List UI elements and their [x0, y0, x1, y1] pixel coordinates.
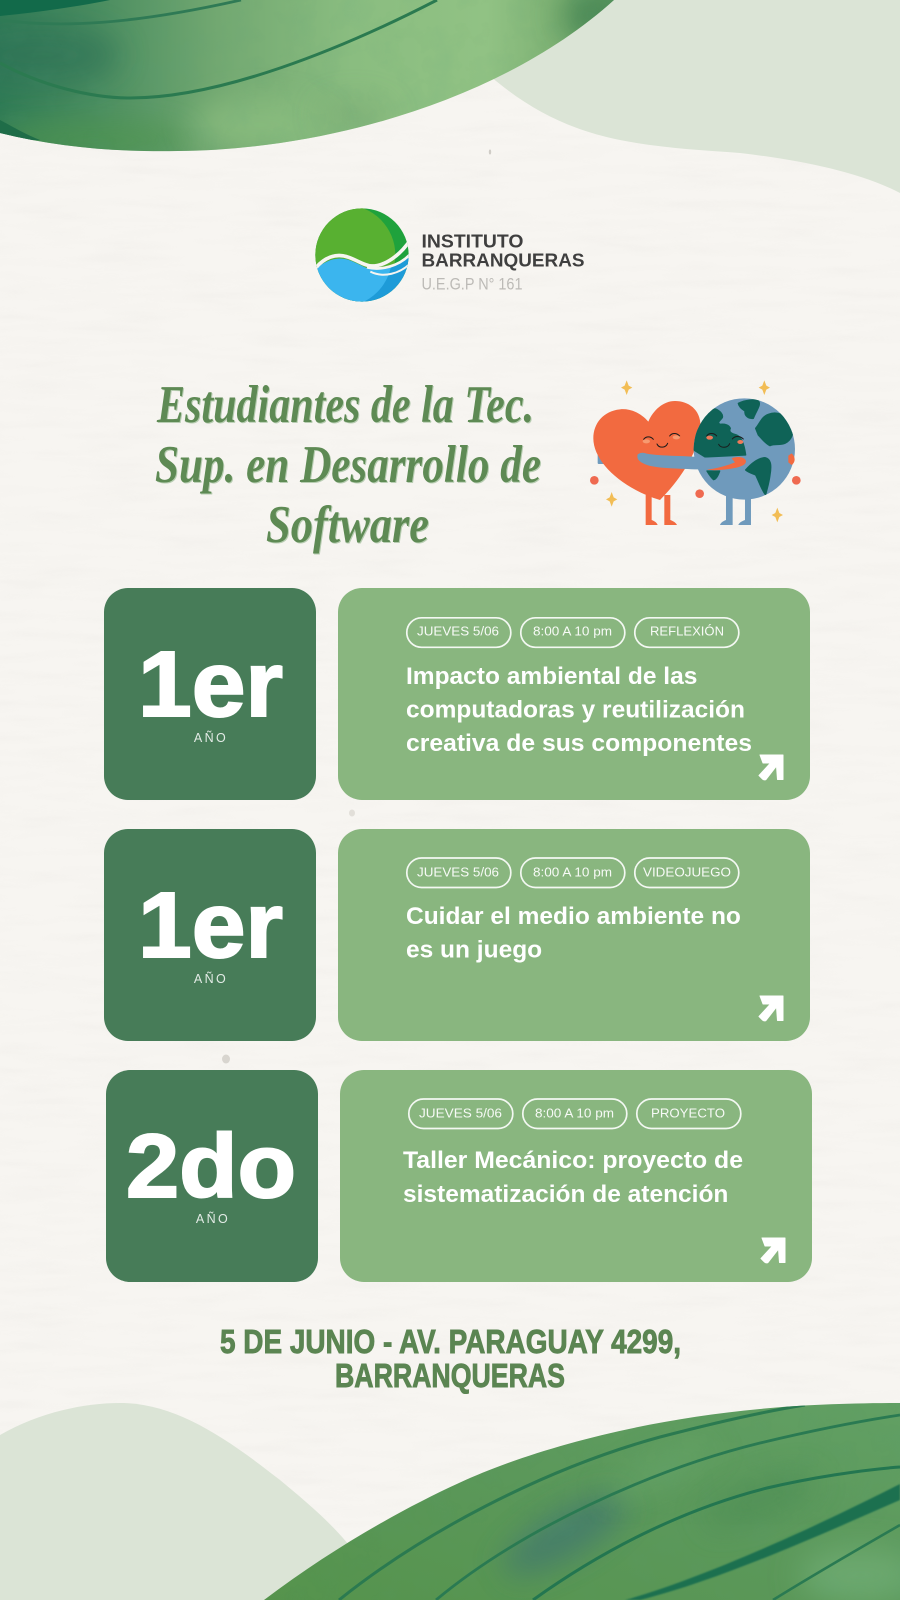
row 2 year box: 1er [138, 873, 283, 977]
row 2 card: 8:00 A 10 pm [533, 864, 612, 880]
row 1 card: JUEVES 5/06 [417, 624, 499, 638]
row 3 year box: AÑO [196, 1212, 230, 1226]
footer date and address [220, 1323, 681, 1394]
logo text: INSTITUTO [422, 232, 524, 252]
title [155, 376, 541, 554]
top left leaf [0, 0, 640, 160]
logo: Instituto Barranqueras [315, 208, 584, 302]
logo text: U.E.G.P N° 161 [422, 276, 522, 294]
row 2 year box [104, 829, 316, 1041]
row 3 card: 8:00 A 10 pm [535, 1106, 614, 1120]
row 2 card: Cuidar el medio ambiente no [406, 903, 741, 930]
flowers [590, 476, 801, 498]
row 3 year box [106, 1070, 318, 1282]
arrow [759, 996, 783, 1021]
row 3 card: PROYECTO [651, 1106, 725, 1120]
bottom right leaf [250, 1395, 900, 1600]
faces [644, 433, 743, 447]
logo text: BARRANQUERAS [422, 250, 584, 270]
title: Sup. en Desarrollo de [155, 436, 541, 494]
row 1 year box: 1er [138, 632, 283, 736]
row 2 card: JUEVES 5/06 [417, 864, 499, 880]
top right pale shape [490, 0, 900, 193]
globe back hand [598, 453, 606, 464]
heart hand on globe side [788, 453, 795, 465]
continents [694, 400, 793, 495]
globe body [694, 398, 795, 500]
footer date and address: BARRANQUERAS [335, 1357, 565, 1394]
row 1 card: 8:00 A 10 pm [533, 624, 612, 638]
logo mark [315, 208, 409, 302]
title: Software [266, 496, 429, 554]
row 2 card: VIDEOJUEGO [643, 864, 731, 880]
footer date and address: 5 DE JUNIO - AV. PARAGUAY 4299, [220, 1323, 681, 1360]
row 3 year box: 2do [126, 1117, 296, 1217]
row 2 card: es un juego [406, 936, 542, 964]
row 3 card: sistematización de atención [403, 1181, 728, 1208]
row 3 card: Taller Mecánico: proyecto de [403, 1147, 743, 1174]
title: Estudiantes de la Tec. [156, 376, 534, 434]
orange arm [707, 457, 746, 470]
row 3 card: JUEVES 5/06 [419, 1106, 502, 1120]
illustration: heart hugging the Earth [590, 380, 801, 525]
row 2 year box: AÑO [194, 972, 228, 986]
sparkles [606, 380, 783, 522]
row 1 card: Impacto ambiental de las [406, 663, 697, 690]
row 1 year box: AÑO [194, 731, 228, 745]
globe legs [720, 495, 751, 525]
row 2 card [338, 829, 810, 1041]
row 3 card [340, 1070, 812, 1282]
blue arm [637, 453, 742, 469]
row 1 card: REFLEXIÓN [650, 624, 724, 638]
row 1 card: computadoras y reutilización [406, 696, 745, 724]
heart body [593, 401, 701, 500]
row 1 card [338, 588, 810, 800]
heart legs [646, 495, 677, 525]
arrow [761, 1238, 785, 1263]
row 1 year box [104, 588, 316, 800]
arrow [759, 755, 783, 780]
bottom left pale shape [0, 1403, 380, 1600]
row 1 card: creativa de sus componentes [406, 730, 752, 757]
logo text [422, 232, 584, 294]
